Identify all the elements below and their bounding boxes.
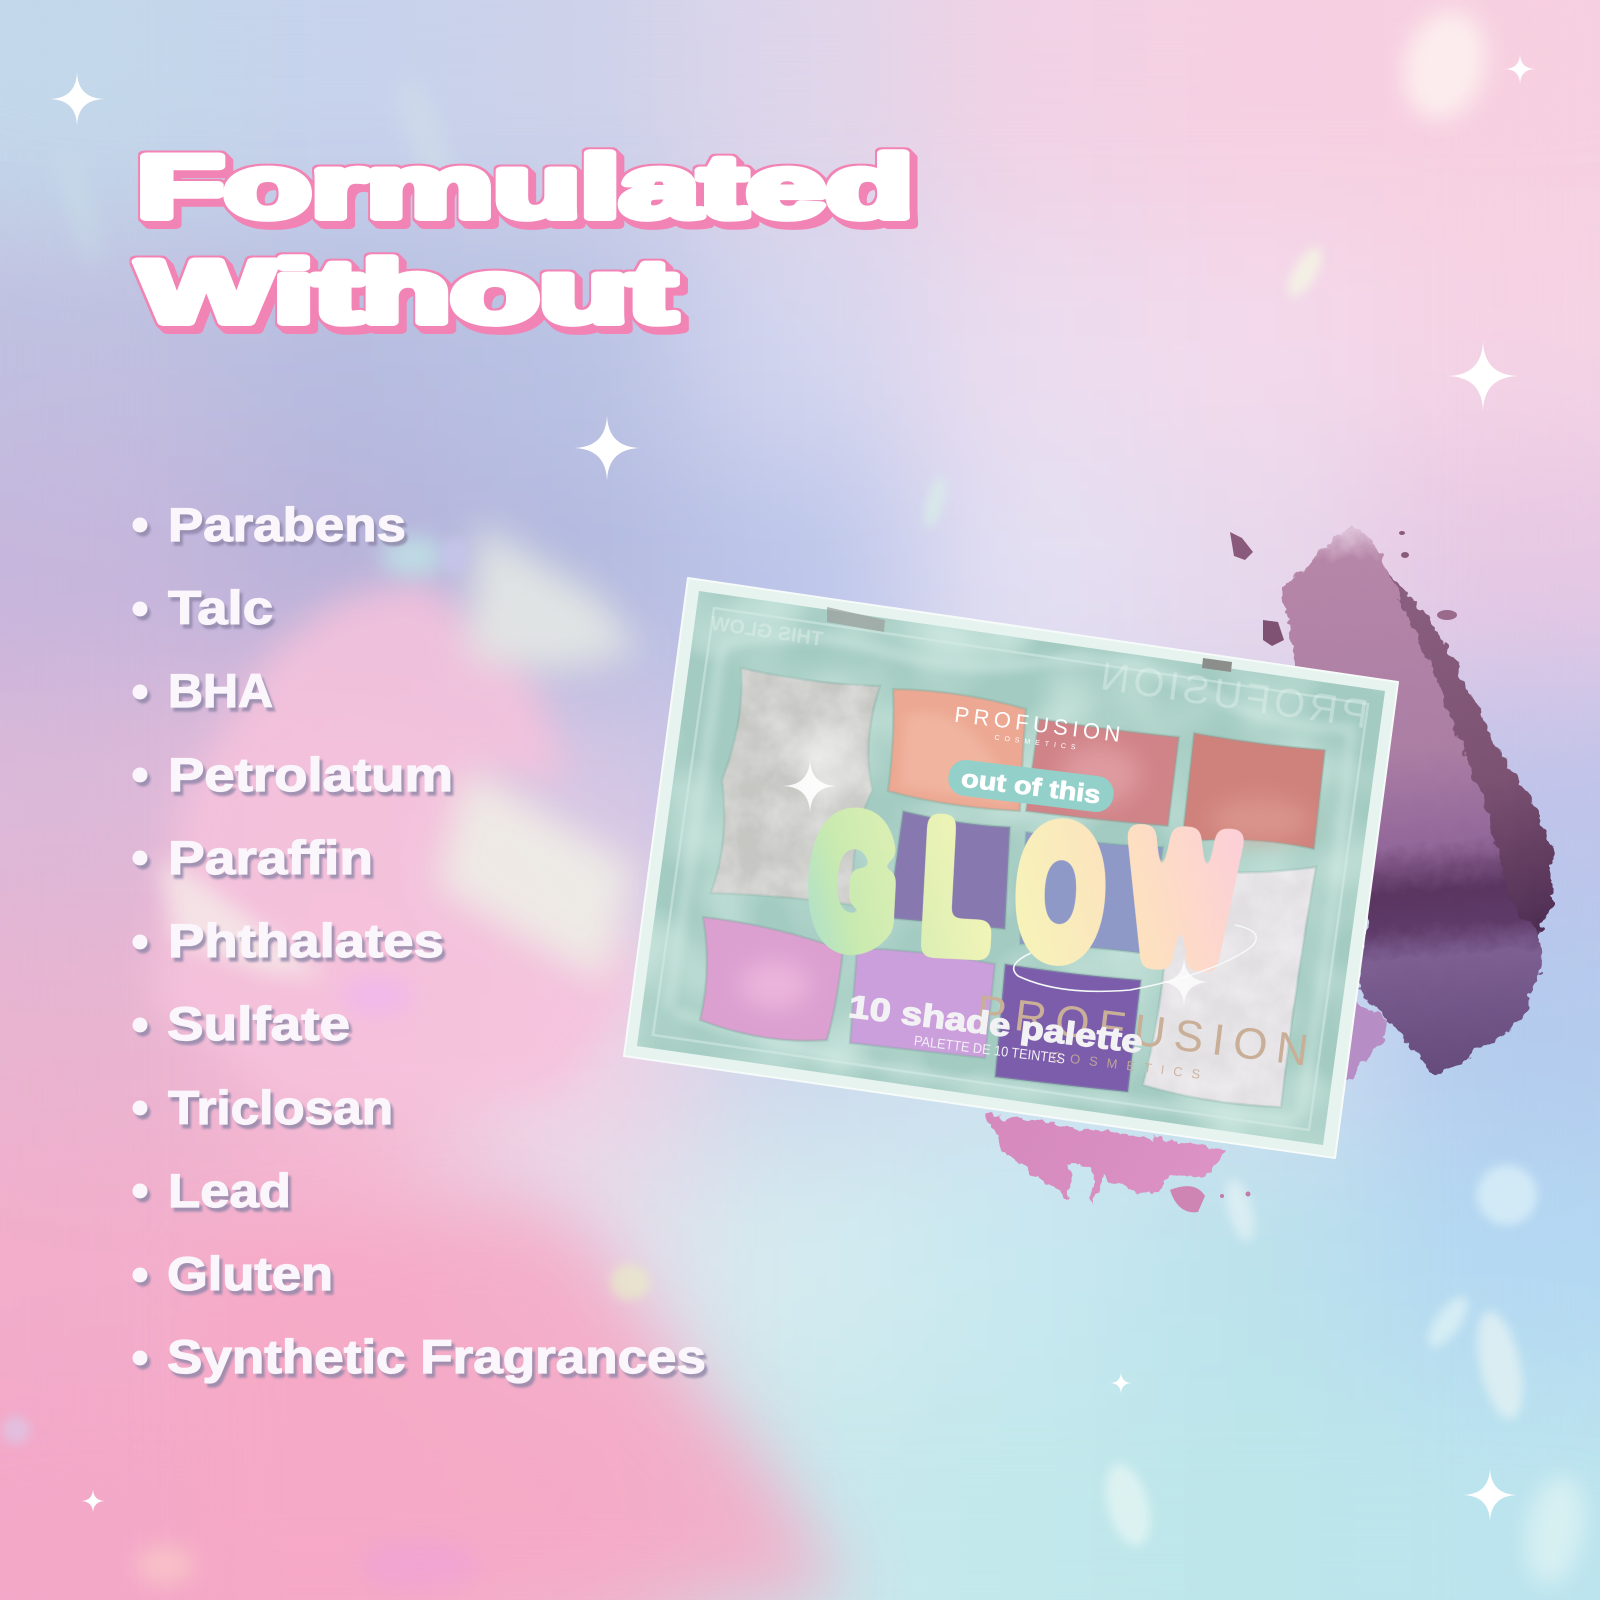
tan brand mark: PROFUSION — [974, 986, 1320, 1077]
palette case — [624, 578, 1398, 1158]
palette sparkles — [783, 759, 1209, 1007]
ingredient list: BHA — [168, 664, 273, 717]
ingredient list: Phthalates — [168, 914, 444, 967]
ingredient list: Talc — [168, 581, 273, 634]
embossed ghost lettering: PROFUSION — [1094, 654, 1371, 737]
ingredient list: Petrolatum — [168, 748, 453, 801]
ingredient list: Gluten — [167, 1247, 333, 1300]
white brand mark: PROFUSION — [953, 702, 1126, 747]
tan brand mark: COSMETICS — [1051, 1049, 1210, 1083]
ingredient list: Sulfate — [167, 997, 350, 1050]
ingredient list: Synthetic Fragrances — [167, 1330, 706, 1383]
case notches — [827, 607, 885, 632]
white brand mark: COSMETICS — [994, 735, 1081, 752]
ingredient list: Paraffin — [168, 831, 373, 884]
embossed ghost lettering: THIS GLOW — [709, 613, 824, 651]
label: 10 shade palette — [845, 988, 1145, 1076]
title: Without — [138, 242, 676, 341]
background pink sweep — [200, 1200, 850, 1600]
logo: GLOW: GLOW — [805, 779, 1267, 1004]
pan swirls — [740, 712, 1310, 1010]
orbit line — [1014, 925, 1256, 991]
eyeshadow palette — [624, 578, 1398, 1158]
ingredient list — [132, 498, 706, 1383]
title — [137, 137, 913, 341]
label: 10 shade palette: PALETTE DE 10 TEINTES — [913, 1032, 1066, 1067]
ingredient list: Triclosan — [168, 1081, 393, 1134]
ingredient list: Lead — [168, 1164, 291, 1217]
badge: out of this: out of this — [960, 765, 1102, 809]
embossed ghost lettering — [709, 613, 1371, 737]
ingredient list: Parabens — [168, 498, 406, 551]
label: 10 shade palette: 10 shade palette — [847, 988, 1145, 1060]
title: Formulated — [137, 137, 913, 236]
palette pans — [700, 668, 1325, 1107]
eyeshadow swatches — [985, 525, 1553, 1212]
badge: out of this — [946, 758, 1116, 814]
